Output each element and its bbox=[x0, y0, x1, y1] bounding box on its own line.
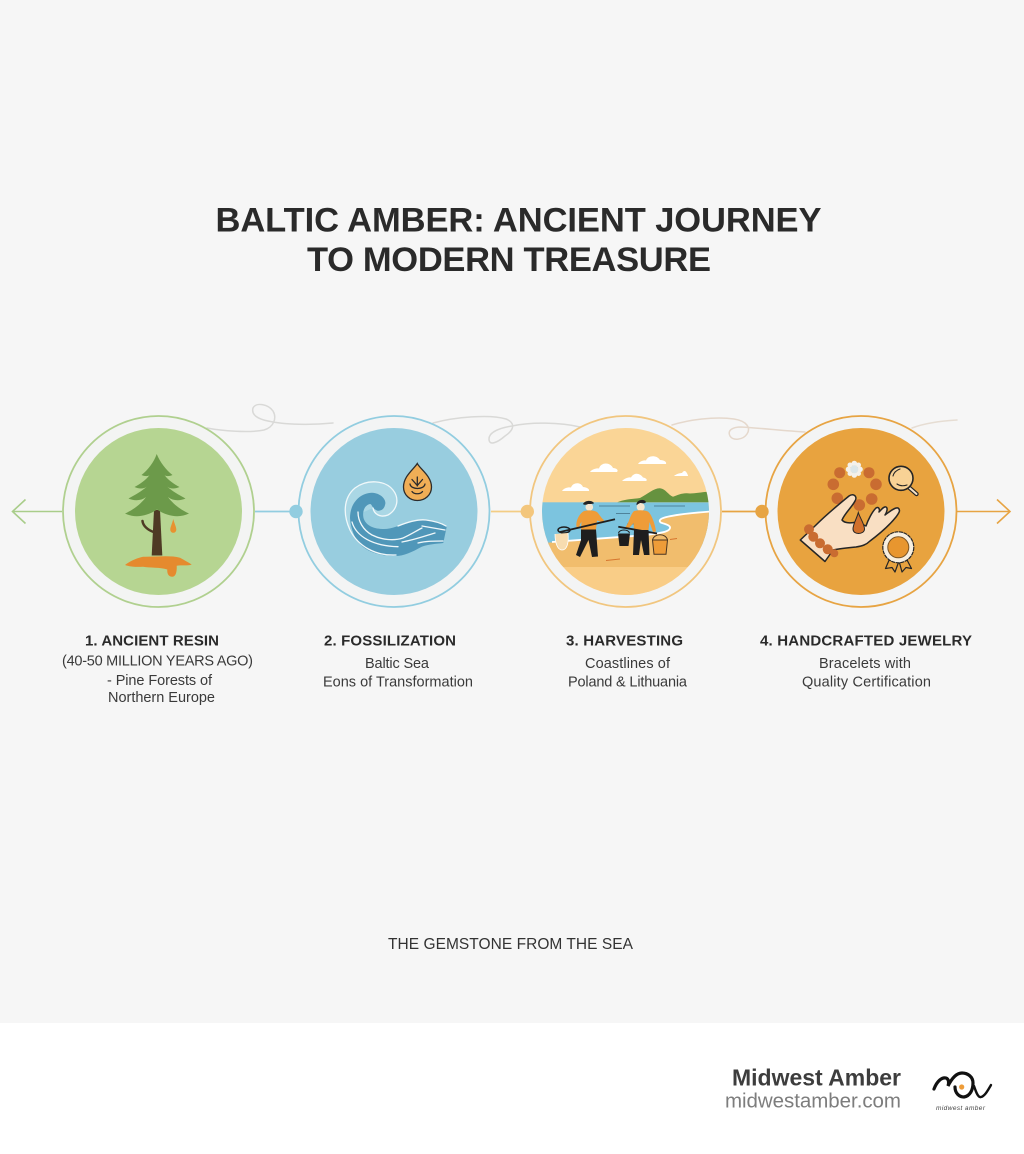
title bbox=[216, 202, 822, 279]
icon: magnifying glass bbox=[889, 466, 916, 494]
footer logo: midwest amber bbox=[936, 1105, 986, 1112]
step 3 label: 3. HARVESTING bbox=[566, 632, 683, 650]
beach scene bbox=[540, 456, 711, 597]
left arrow bbox=[12, 500, 62, 524]
step 4 circle: jewelry bbox=[766, 416, 956, 607]
step 2 label: 2. FOSSILIZATION bbox=[324, 632, 456, 650]
icon: orange bucket bbox=[652, 535, 668, 554]
right arrow bbox=[957, 500, 1010, 524]
title: TO MODERN TREASURE bbox=[307, 241, 711, 279]
icon: harvester right bbox=[618, 500, 657, 555]
step 4 label bbox=[760, 632, 972, 690]
connector dot: orange bbox=[755, 505, 769, 518]
icon: harvester left bbox=[555, 501, 615, 557]
connector dot: yellow bbox=[521, 505, 534, 518]
step 1 circle: pine tree bbox=[63, 416, 254, 607]
step 4 label: Quality Certification bbox=[802, 674, 931, 690]
step 3 label: Coastlines of bbox=[585, 656, 671, 672]
icon: diamond bbox=[846, 461, 863, 478]
icon: amber drop in hand bbox=[853, 512, 864, 534]
footer brand text: Midwest Amber bbox=[732, 1064, 901, 1090]
step 2 circle: wave bbox=[298, 416, 490, 607]
connector line: yellow bbox=[491, 510, 527, 512]
icon: amber drop bbox=[404, 464, 432, 500]
icon: amber necklace beads bbox=[828, 467, 882, 511]
step 2 label: Eons of Transformation bbox=[323, 674, 473, 690]
icon: sea ripples bbox=[599, 506, 685, 524]
footer logo bbox=[934, 1073, 991, 1112]
connector dot: blue bbox=[289, 505, 303, 518]
step 4 label: Bracelets with bbox=[819, 656, 911, 672]
icon: sand marks bbox=[606, 538, 677, 560]
icon: pine tree bbox=[125, 454, 192, 577]
footer brand text bbox=[725, 1064, 901, 1112]
step 4 label: 4. HANDCRAFTED JEWELRY bbox=[760, 632, 972, 650]
step 1 label: 1. ANCIENT RESIN bbox=[85, 632, 219, 650]
step 1 label: Northern Europe bbox=[108, 690, 215, 706]
step 3 circle: beach bbox=[530, 416, 721, 607]
title: BALTIC AMBER: ANCIENT JOURNEY bbox=[216, 202, 822, 240]
step 2 label bbox=[323, 632, 473, 690]
step 1 label: - Pine Forests of bbox=[107, 673, 213, 689]
icon: hand bbox=[800, 495, 899, 562]
step 1 label bbox=[62, 632, 253, 706]
step 2 label: Baltic Sea bbox=[365, 656, 430, 672]
step 3 label bbox=[566, 632, 688, 690]
footer brand text: midwestamber.com bbox=[725, 1090, 901, 1112]
connector line: blue bbox=[255, 510, 296, 512]
tagline: THE GEMSTONE FROM THE SEA bbox=[388, 936, 634, 953]
icon: quality certificate rosette bbox=[883, 532, 914, 572]
icon: bracelet beads bbox=[804, 524, 838, 557]
step 3 label: Poland & Lithuania bbox=[568, 674, 688, 690]
step 1 label: (40-50 MILLION YEARS AGO) bbox=[62, 654, 253, 670]
decorative squiggles bbox=[207, 404, 957, 443]
icon: black bucket bbox=[618, 530, 630, 546]
icon: clouds bbox=[562, 456, 688, 491]
connector line: orange bbox=[722, 510, 762, 512]
icon: wave bbox=[345, 482, 447, 556]
